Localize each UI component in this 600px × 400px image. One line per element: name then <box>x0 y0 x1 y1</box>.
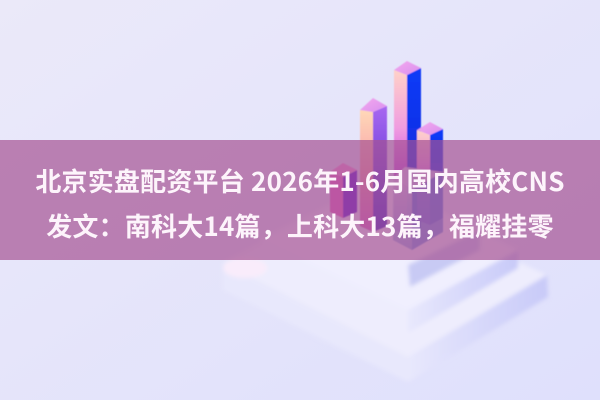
title text: 发文：南科大14篇，上科大13篇，福耀挂零 <box>46 207 554 244</box>
medium bar <box>360 98 387 232</box>
short bar <box>417 122 443 225</box>
title text <box>35 162 565 244</box>
front pink bar <box>330 163 357 218</box>
title band <box>0 140 600 260</box>
tall bar <box>394 61 421 235</box>
bar chart illustration <box>330 61 443 250</box>
glass cube <box>393 167 443 250</box>
title text: 北京实盘配资平台 2026年1-6月国内高校CNS <box>35 162 565 199</box>
stepped platform <box>223 180 548 382</box>
